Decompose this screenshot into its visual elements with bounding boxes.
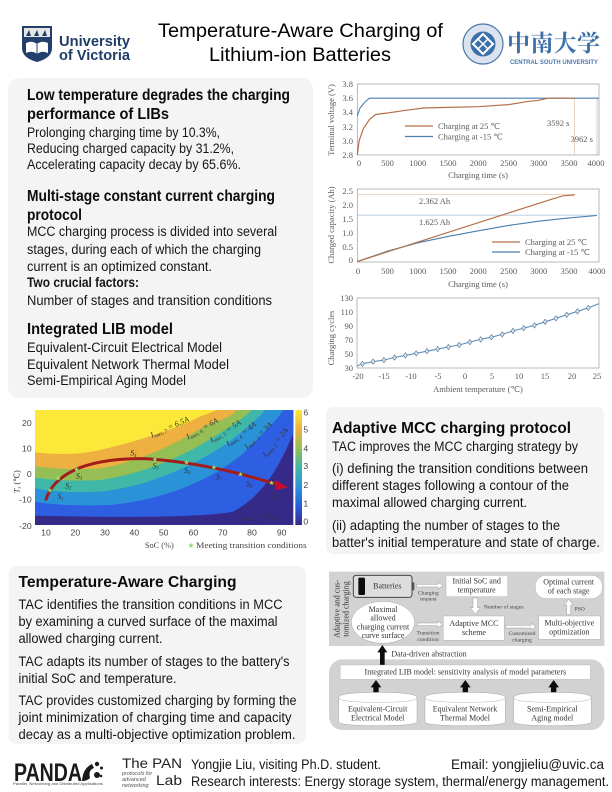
transition points: ★ xyxy=(184,459,190,467)
box: optimal current: of each stage xyxy=(548,587,590,596)
chart: charging cycles vs ambient temperature: 110 xyxy=(341,307,353,317)
text block: MCC description xyxy=(27,224,277,308)
logo: Central South University: CENTRAL SOUTH UNIVERSITY xyxy=(510,60,598,66)
stage labels: S xyxy=(184,466,188,475)
ellipse: maximal allowed current surface: allowed xyxy=(370,614,396,623)
box: initial SoC: temperature xyxy=(458,586,496,595)
box: multi-objective optimization: Multi-objective xyxy=(544,618,595,627)
axis labels xyxy=(12,418,307,550)
text block: degradation figures: Accelerating capacity decay by 65.6%. xyxy=(27,157,241,172)
stage labels: 6 xyxy=(188,471,191,476)
box: multi-objective optimization: optimization xyxy=(549,627,590,636)
contour labels: max, 7 xyxy=(153,428,169,440)
arrow labels: request xyxy=(420,596,437,602)
logo: The PAN Lab: Lab xyxy=(156,772,182,788)
arrow labels: PSO xyxy=(574,606,585,612)
chart: charged capacity vs charging time: 0 xyxy=(349,255,353,265)
box: integrated LIB model: Integrated LIB model: sensitivity analysis of model parameters xyxy=(365,668,566,677)
contour labels: max, 3 xyxy=(247,436,262,450)
chart: terminal voltage vs charging time: 3962 s xyxy=(570,134,593,144)
chart: charged capacity vs charging time: 500 xyxy=(381,266,394,276)
text block: MCC description: MCC charging process is divided into several xyxy=(27,224,277,239)
contour labels: I xyxy=(208,436,215,445)
title xyxy=(158,21,444,66)
chart: terminal voltage vs charging time: 3592 s xyxy=(547,118,569,128)
logo: The PAN Lab xyxy=(121,755,182,789)
chart: charged capacity vs charging time xyxy=(326,186,606,289)
author contact and research interests: Yongjie Liu, visiting Ph.D. student. xyxy=(191,757,381,772)
flow arrows xyxy=(417,582,573,630)
contour labels: = 3A xyxy=(255,420,274,439)
axis labels: 10 xyxy=(22,443,32,453)
text block: TAC description xyxy=(18,597,296,742)
stage labels: S xyxy=(58,492,62,501)
colour bar: 6 xyxy=(303,408,308,418)
logo: Central South University: 中南大学 xyxy=(507,25,600,58)
text block: protocol description: batter's initial temperature and state of charge. xyxy=(332,535,600,550)
stage labels: 9 xyxy=(274,496,277,501)
logo: University of Victoria: of Victoria xyxy=(59,48,131,64)
colour bar: 2 xyxy=(303,480,308,490)
panel: temperature-aware charging xyxy=(8,566,306,744)
text block: protocol description xyxy=(332,439,600,550)
heading: low temperature xyxy=(27,87,290,123)
icon: battery: Batteries xyxy=(373,581,402,590)
arrow labels: Customized xyxy=(508,631,536,637)
text block: protocol description: (ii) adapting the number of stages to the xyxy=(332,518,560,533)
ellipse: maximal allowed current surface: charging current xyxy=(357,622,410,631)
text block: protocol description: TAC improves the MCC charging strategy by xyxy=(332,439,578,454)
text block: model list: Equivalent-Circuit Electrical Model xyxy=(27,340,222,355)
chart: terminal voltage vs charging time: 2500 xyxy=(500,158,517,168)
contour labels: I xyxy=(242,442,250,451)
heading: MCC protocol: protocol xyxy=(27,207,82,224)
chart: charging cycles vs ambient temperature: -20 xyxy=(352,371,364,381)
chart: terminal voltage vs charging time: 2.8 xyxy=(342,150,353,160)
arrow: charging trajectory xyxy=(46,459,288,499)
chart: terminal voltage vs charging time: Charging at 25 ℃ xyxy=(438,121,500,131)
text block: degradation figures xyxy=(27,125,241,172)
transition points: ★ xyxy=(55,475,61,483)
stage labels: S xyxy=(246,480,250,489)
text block: TAC description: joint minimization of charging time and capacity xyxy=(18,710,292,725)
chart: terminal voltage vs charging time: 4000 xyxy=(588,158,604,168)
panel: low temperature, MCC protocol and LIB model xyxy=(8,78,313,398)
text block: model list: Semi-Empirical Aging Model xyxy=(27,373,186,388)
text block: degradation figures: Reducing charged capacity by 31.2%, xyxy=(27,141,234,156)
heading: integrated LIB model: Integrated LIB model xyxy=(27,321,173,338)
stage labels: S xyxy=(153,461,157,470)
text block: degradation figures: Prolonging charging time by 10.3%, xyxy=(27,125,220,140)
side label: tomized charging xyxy=(342,581,351,637)
stage labels: 1 xyxy=(62,497,64,502)
axis labels: SoC (%) xyxy=(145,541,174,550)
box: multi-objective optimization xyxy=(539,616,600,639)
transition points: ★ xyxy=(269,479,275,487)
chart: charged capacity vs charging time: 0 xyxy=(356,266,360,276)
transition points xyxy=(47,456,275,494)
contour labels xyxy=(148,415,291,523)
chart: charging cycles vs ambient temperature: 130 xyxy=(340,293,353,303)
text block: TAC description: decay as a multi-objective optimization problem. xyxy=(18,727,296,742)
transition points: ★ xyxy=(238,470,244,478)
text block: protocol description: (i) defining the transition conditions between xyxy=(332,461,588,476)
colour bar xyxy=(295,408,308,527)
chart: charging cycles vs ambient temperature xyxy=(326,293,601,394)
logo: The PAN Lab: The PAN xyxy=(122,755,182,771)
chart: charged capacity vs charging time: 4000 xyxy=(588,266,606,276)
axis labels: 30 xyxy=(100,528,110,538)
lower block background xyxy=(329,659,604,730)
logo: The PAN Lab: protocols for xyxy=(121,771,153,777)
chart: terminal voltage vs charging time: 1000 xyxy=(409,158,426,168)
arrow labels: Number of stages xyxy=(484,603,524,610)
transition points: ★ xyxy=(74,465,80,473)
axis labels: 50 xyxy=(159,528,169,538)
chart: terminal voltage vs charging time: 3000 xyxy=(530,158,547,168)
contour labels: max, 1 xyxy=(244,517,259,523)
cylinder: electrical model: Equivalent-Circuit xyxy=(348,705,408,714)
chart: terminal voltage vs charging time: 500 xyxy=(381,158,394,168)
stage labels: 8 xyxy=(250,485,253,490)
author contact and research interests: Email: yongjieliu@uvic.ca xyxy=(451,757,605,772)
chart: charged capacity vs charging time: 0.5 xyxy=(342,242,353,252)
text block: TAC description: TAC identifies the transition conditions in MCC xyxy=(18,597,283,612)
chart: terminal voltage vs charging time: 2000 xyxy=(470,158,487,168)
stage labels: S xyxy=(130,449,134,458)
chart: charged capacity vs charging time: 1.5 xyxy=(342,214,353,224)
heading: low temperature: Low temperature degrades the charging xyxy=(27,87,290,104)
icon: panda xyxy=(82,762,103,781)
axis labels: 40 xyxy=(130,528,139,538)
axis labels: ★ xyxy=(188,541,194,550)
chart: terminal voltage vs charging time: Charging time (s) xyxy=(448,170,508,180)
side label xyxy=(333,580,351,638)
axis labels: -20 xyxy=(19,521,32,531)
chart: charging cycles vs ambient temperature: 10 xyxy=(515,371,523,381)
ellipse: maximal allowed current surface xyxy=(351,601,415,643)
axis labels: 10 xyxy=(41,528,51,538)
text block: TAC description: by examining a curved surface of the maximal xyxy=(18,614,278,629)
title: Temperature-Aware Charging of xyxy=(158,21,444,42)
axis labels: s xyxy=(17,487,23,489)
arrow labels: charging xyxy=(512,637,532,643)
arrow labels xyxy=(416,590,585,643)
logo: The PAN Lab: networking xyxy=(122,783,150,789)
text block: TAC description: TAC adapts its number of stages to the battery's xyxy=(18,654,290,669)
chart: charged capacity vs charging time: 2.5 xyxy=(342,186,353,196)
upper block background xyxy=(329,572,604,646)
contour labels: max, 5 xyxy=(213,431,228,444)
contour labels: = 5A xyxy=(222,418,243,435)
contour labels: I xyxy=(149,430,155,440)
cylinder: electrical model: Electrical Model xyxy=(351,713,405,722)
panel: adaptive MCC charging protocol xyxy=(326,407,604,554)
chart: charged capacity vs charging time: 2.0 xyxy=(342,200,353,210)
chart: charging cycles vs ambient temperature: 70 xyxy=(344,335,353,345)
logo: University of Victoria: University xyxy=(59,34,130,50)
chart: charging cycles vs ambient temperature: Charging cycles xyxy=(326,311,336,365)
logo: Central South University xyxy=(463,24,600,66)
colour bar: 1 xyxy=(303,498,308,508)
contour labels: I xyxy=(224,439,232,448)
stage labels: S xyxy=(216,473,220,482)
text block: MCC description: current is an optimized constant. xyxy=(27,259,212,274)
contour labels: = 2A xyxy=(272,426,290,446)
cylinder: aging model: Aging model xyxy=(531,713,574,722)
stage labels: 4 xyxy=(134,454,137,459)
box: initial SoC xyxy=(446,575,508,597)
cylinder: thermal model xyxy=(425,692,505,726)
model arrows xyxy=(371,680,559,696)
contour labels: max, 6 xyxy=(189,429,205,441)
contour labels: = 4A xyxy=(238,420,258,438)
axis labels: 60 xyxy=(189,528,198,538)
chart: charged capacity vs charging time: Charged capacity (Ah) xyxy=(326,186,336,264)
chart: terminal voltage vs charging time: 3.8 xyxy=(342,79,353,89)
axis labels: 20 xyxy=(71,528,80,538)
contour labels: = 6.5A xyxy=(164,415,190,433)
box: initial SoC: Initial SoC and xyxy=(452,577,501,586)
cylinder: electrical model xyxy=(339,692,417,726)
colour bar: 0 xyxy=(303,517,308,527)
chart: charged capacity vs charging time: 1.0 xyxy=(342,228,353,238)
text block: TAC description: TAC provides customized charging by forming the xyxy=(18,693,296,708)
cylinder: aging model: Semi-Empirical xyxy=(527,705,578,714)
text block: MCC description: stages, during each of which the charging xyxy=(27,242,261,257)
arrow: data-driven abstraction xyxy=(377,645,467,665)
chart: charged capacity vs charging time: 3000 xyxy=(530,266,547,276)
text block: TAC description: allowed charging current. xyxy=(18,631,162,646)
chart: terminal voltage vs charging time: Terminal voltage (V) xyxy=(326,84,336,156)
chart: contour of maximal allowed charging current xyxy=(12,408,308,550)
chart: terminal voltage vs charging time: 0 xyxy=(357,158,361,168)
box: optimal current xyxy=(535,575,602,599)
axis labels: Meeting transition conditions xyxy=(196,541,307,550)
chart: charging cycles vs ambient temperature: 50 xyxy=(344,349,353,359)
icon: CSU seal xyxy=(463,24,503,64)
chart: charging cycles vs ambient temperature: 0 xyxy=(463,371,467,381)
transition points: ★ xyxy=(152,456,158,464)
logo: PANDA: PANDA xyxy=(14,759,82,787)
box: optimal current: Optimal current xyxy=(543,578,595,587)
box: adaptive MCC scheme: scheme xyxy=(462,628,486,637)
stage labels: S xyxy=(65,481,69,490)
chart: charging cycles vs ambient temperature: 20 xyxy=(568,371,576,381)
chart: terminal voltage vs charging time: 1500 xyxy=(440,158,456,168)
cylinder: thermal model: Thermal Model xyxy=(440,713,491,722)
contour labels: I xyxy=(185,432,191,441)
cylinder: aging model xyxy=(514,692,591,726)
logo: University of Victoria xyxy=(22,26,131,64)
chart: charged capacity vs charging time: 1000 xyxy=(409,266,426,276)
axis labels: (℃) xyxy=(12,470,21,487)
chart: charged capacity vs charging time: 2.362 Ah xyxy=(419,196,451,206)
contour labels: I xyxy=(242,512,244,521)
chart: terminal voltage vs charging time: Charging at -15 ℃ xyxy=(438,132,503,142)
stage labels: 5 xyxy=(157,467,160,472)
text block: protocol description: maximal allowed charging current. xyxy=(332,495,527,510)
transition points: ★ xyxy=(47,486,53,494)
contour labels: max, 2 xyxy=(266,443,280,458)
axis labels: 80 xyxy=(247,528,257,538)
chart: charging cycles vs ambient temperature: 90 xyxy=(344,321,353,331)
chart: charging cycles vs ambient temperature: 30 xyxy=(344,363,353,373)
chart: charged capacity vs charging time: 2500 xyxy=(500,266,517,276)
chart: terminal voltage vs charging time xyxy=(326,79,604,180)
chart: charging cycles vs ambient temperature: -5 xyxy=(434,371,442,381)
box: adaptive MCC scheme: Adaptive MCC xyxy=(449,619,499,628)
stage labels: 7 xyxy=(220,478,223,483)
chart: terminal voltage vs charging time: 3.0 xyxy=(342,136,353,146)
icon: battery xyxy=(353,575,414,597)
flow diagram: adaptive and customized charging xyxy=(329,572,604,730)
chart: charging cycles vs ambient temperature: 15 xyxy=(541,371,549,381)
stage labels: 2 xyxy=(69,487,72,492)
axis labels: 0 xyxy=(27,469,32,479)
chart: charging cycles vs ambient temperature: Ambient temperature (℃) xyxy=(433,384,523,394)
axis labels: T xyxy=(12,489,21,493)
side label: Adaptive and cus- xyxy=(333,580,342,638)
chart: charged capacity vs charging time: 1500 xyxy=(440,266,456,276)
icon: UVic shield xyxy=(22,26,52,62)
box: integrated LIB model xyxy=(340,665,590,679)
text block: TAC description: initial SoC and temperature. xyxy=(18,671,176,686)
text block: model list: Equivalent Network Thermal Model xyxy=(27,357,229,372)
chart: charging cycles vs ambient temperature: -15 xyxy=(378,371,390,381)
stage labels: 3 xyxy=(80,477,83,482)
contour labels: = 6A xyxy=(199,416,220,433)
text block: MCC description: Two crucial factors: xyxy=(27,275,139,290)
chart: charged capacity vs charging time: 2000 xyxy=(470,266,487,276)
ellipse: maximal allowed current surface: curve surface xyxy=(362,631,405,640)
chart: charging cycles vs ambient temperature: 5 xyxy=(490,371,494,381)
axis labels: 90 xyxy=(277,528,287,538)
heading: MCC protocol: Multi-stage constant current charging xyxy=(27,188,275,205)
arrow: data-driven abstraction: Data-driven abstraction xyxy=(391,649,467,658)
chart: terminal voltage vs charging time: 3.4 xyxy=(342,107,354,117)
chart: terminal voltage vs charging time: 3500 xyxy=(560,158,578,168)
text block: model list xyxy=(27,340,229,388)
chart: charged capacity vs charging time: Charging at -15 ℃ xyxy=(525,247,590,257)
heading: Temperature-Aware Charging xyxy=(18,574,236,591)
cylinder: thermal model: Equivalent Network xyxy=(433,705,497,714)
contour labels: I xyxy=(261,451,269,459)
text block: MCC description: Number of stages and transition conditions xyxy=(27,293,272,308)
stage labels: S xyxy=(270,490,274,499)
text block: protocol description: different stages following a contour of the xyxy=(332,478,569,493)
box: adaptive MCC scheme xyxy=(443,616,504,640)
axis labels: 70 xyxy=(218,528,228,538)
chart: terminal voltage vs charging time: 3.2 xyxy=(342,122,353,132)
chart: charging cycles vs ambient temperature: -10 xyxy=(405,371,417,381)
author contact and research interests xyxy=(191,757,609,789)
chart: charged capacity vs charging time: 1.625 Ah xyxy=(419,217,451,227)
ellipse: maximal allowed current surface: Maximal xyxy=(369,605,398,614)
title: Lithium-ion Batteries xyxy=(209,45,391,66)
arrow labels: Transition xyxy=(416,631,440,637)
contour labels: max, 4 xyxy=(229,434,244,448)
stage labels xyxy=(58,449,277,502)
arrow labels: Charging xyxy=(418,590,439,596)
chart: charged capacity vs charging time: 3500 xyxy=(560,266,578,276)
stage labels: S xyxy=(76,471,80,480)
colour bar: 5 xyxy=(303,424,308,434)
logo: PANDA: Parallel, Networking and Distributed Applications xyxy=(13,782,103,786)
chart: terminal voltage vs charging time: 3.6 xyxy=(342,93,353,103)
contour labels: = 1A xyxy=(259,512,277,521)
heading: MCC protocol xyxy=(27,188,275,224)
logo: The PAN Lab: advanced xyxy=(122,777,147,783)
axis labels: -10 xyxy=(19,495,32,505)
heading: Adaptive MCC charging protocol xyxy=(332,420,571,437)
chart: charged capacity vs charging time: Charging at 25 ℃ xyxy=(525,237,587,247)
colour bar: 4 xyxy=(303,443,308,453)
chart: charging cycles vs ambient temperature: 25 xyxy=(593,371,601,381)
chart: charged capacity vs charging time: Charging time (s) xyxy=(448,279,508,289)
arrow labels: condition xyxy=(417,637,439,643)
transition points: ★ xyxy=(211,464,217,472)
heading: low temperature: performance of LIBs xyxy=(27,106,169,123)
colour bar: 3 xyxy=(303,461,308,471)
axis labels: 20 xyxy=(22,418,32,428)
